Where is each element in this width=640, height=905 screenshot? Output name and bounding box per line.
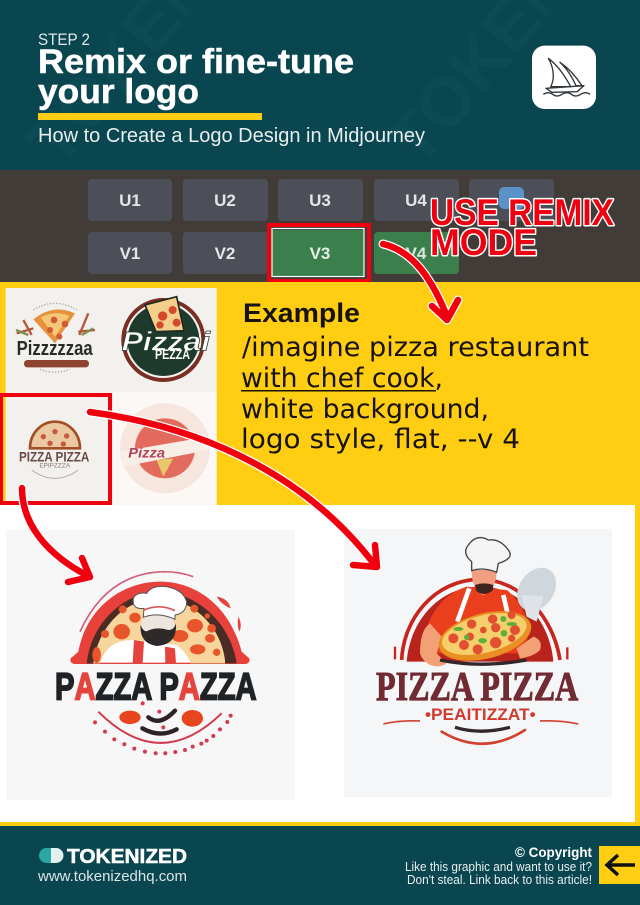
arrow: thumbnail to right logo — [90, 412, 377, 567]
button: U3: U3 — [309, 191, 331, 210]
button: U2: U2 — [214, 191, 236, 210]
thumb 3: PIZZA PIZZA — [19, 449, 89, 465]
button: U3 — [278, 179, 363, 221]
button: V1 — [88, 232, 172, 274]
button: refresh — [469, 179, 554, 221]
callout: use remix mode: MODE — [430, 222, 537, 263]
logo: chef with half pizza: PAZZA PAZZA — [55, 666, 257, 708]
title — [38, 43, 354, 111]
title: your logo — [38, 73, 199, 111]
button: U1 — [88, 179, 172, 221]
title underline — [38, 113, 262, 120]
example text — [241, 298, 589, 455]
logo: chef holding pizza — [376, 538, 578, 744]
thumb 2: Pizzai — [122, 327, 211, 357]
example text: Example — [243, 298, 360, 328]
thumb 2: PEZZA — [155, 346, 190, 362]
button: V2: V2 — [215, 244, 235, 263]
button: V3 highlighted — [269, 225, 369, 281]
copyright: © Copyright — [515, 844, 592, 860]
example text: white background, — [241, 394, 489, 425]
button: V3 highlighted: V3 — [310, 244, 330, 263]
icon: back arrow — [599, 846, 640, 884]
title: Remix or fine-tune — [38, 43, 354, 81]
website: www.tokenizedhq.com — [37, 868, 187, 885]
button: V2 — [183, 232, 268, 274]
highlight box on thumbnail — [1, 395, 110, 503]
button: V1: V1 — [120, 244, 140, 263]
yellow background — [0, 282, 640, 826]
example text: with chef cook, — [241, 363, 443, 394]
button: V4 — [374, 232, 459, 274]
example text: logo style, flat, --v 4 — [241, 424, 520, 455]
header band — [0, 0, 640, 180]
button: U2 — [183, 179, 268, 221]
callout: use remix mode — [430, 192, 614, 263]
callout: use remix mode: USE REMIX — [430, 192, 614, 233]
subtitle: How to Create a Logo Design in Midjourney — [38, 125, 425, 147]
footer — [0, 826, 640, 905]
logo: chef with half pizza — [55, 572, 257, 755]
arrow: V3 to remix — [383, 244, 458, 320]
thumb 2 — [122, 297, 211, 380]
logo: chef holding pizza: PIZZA PIZZA — [376, 664, 578, 710]
pizza thumbnails — [6, 288, 217, 505]
thumb 4: Pizza — [128, 444, 165, 460]
thumb 4 — [113, 392, 217, 505]
step label: STEP 2 — [38, 31, 90, 49]
thumb 3 — [19, 422, 89, 478]
logo: chef holding pizza: •PEAITIZZAT• — [425, 705, 536, 724]
copyright: Don't steal. Link back to this article! — [407, 873, 592, 887]
example text: /imagine pizza restaurant — [242, 332, 589, 363]
logo: Tokenized: TOKENIZED — [67, 846, 187, 868]
copyright — [405, 844, 592, 887]
button: U4 — [374, 179, 459, 221]
thumb 3: EPIPZZZA — [39, 464, 70, 470]
thumb 1 — [16, 303, 95, 372]
button: V4: V4 — [406, 244, 427, 263]
results panel — [0, 505, 635, 822]
button: U1: U1 — [119, 191, 141, 210]
arrow: thumbnail to left logo — [22, 488, 90, 582]
icon: Midjourney boat — [532, 46, 596, 109]
button: U4: U4 — [405, 191, 427, 210]
button panel — [0, 170, 640, 282]
thumb 1: Pizzzzzaa — [17, 338, 93, 360]
copyright: Like this graphic and want to use it? — [405, 860, 592, 874]
